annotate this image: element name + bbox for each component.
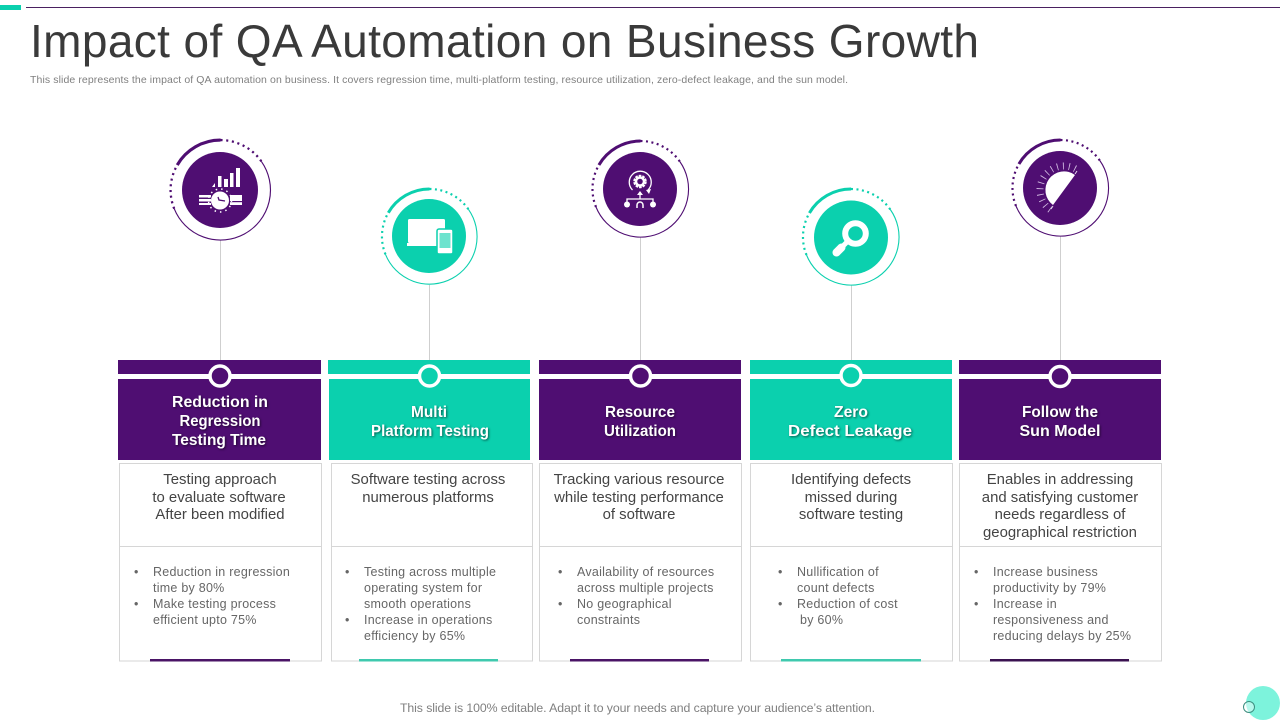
icon: chart and clock in ring [171,140,270,240]
card: Enables in addressing [987,472,1133,488]
card: After been modified [155,507,285,523]
card: • [345,613,350,627]
card: productivity by 79% [993,581,1106,595]
card: Software testing across [351,472,505,488]
header [328,360,530,460]
card: efficiency by 65% [364,629,465,643]
header: Sun Model [1020,423,1100,440]
top accent bar [0,5,1280,10]
header [118,360,321,460]
card: Testing approach [163,472,277,488]
card: missed during [805,490,897,506]
card: constraints [577,613,640,627]
card [540,464,742,662]
card: Reduction of cost [797,597,898,611]
card: • [778,597,783,611]
card [750,464,952,662]
icon: sun dial in ring [1012,140,1109,236]
card: Identifying defects [791,472,911,488]
header: Resource [605,404,675,421]
card: and satisfying customer [982,490,1138,506]
footer note: This slide is 100% editable. Adapt it to your needs and capture your audience’s attention. [400,701,875,715]
card: reducing delays by 25% [993,629,1131,643]
card: geographical restriction [983,525,1137,541]
card: • [974,565,979,579]
card: of software [603,507,675,523]
card: across multiple projects [577,581,714,595]
header: Follow the [1022,404,1098,421]
connector line [851,285,852,360]
card: • [134,597,139,611]
card: Make testing process [153,597,276,611]
card: while testing performance [553,490,724,506]
card: • [974,597,979,611]
header [539,360,741,460]
card: Testing across multiple [364,565,496,579]
card: numerous platforms [362,490,494,506]
header: Reduction in [172,394,268,411]
card: time by 80% [153,581,225,595]
column 3: resource utilization [539,141,742,661]
card: software testing [799,507,903,523]
card: Nullification of [797,565,879,579]
header: Zero [834,404,868,421]
title: Impact of QA Automation on Business Growth [30,15,979,67]
header: Testing Time [172,432,266,449]
card [960,464,1162,662]
card: No geographical [577,597,672,611]
card: Increase in [993,597,1057,611]
card [120,464,322,662]
icon: magnifier in ring [803,189,899,285]
card: by 60% [800,613,843,627]
connector line [220,240,221,360]
card [332,464,532,662]
card: • [134,565,139,579]
card: Availability of resources [577,565,714,579]
connector line [640,237,641,360]
card: smooth operations [364,597,471,611]
corner decoration [1244,686,1280,720]
header: Multi [411,404,447,421]
card: efficient upto 75% [153,613,257,627]
card: • [558,597,563,611]
icon: gear and network in ring [592,141,689,237]
connector line [429,285,430,360]
card: operating system for [364,581,482,595]
card: responsiveness and [993,613,1109,627]
header: Defect Leakage [788,423,912,440]
card: • [778,565,783,579]
column 2: multi platform testing [328,189,532,662]
card: count defects [797,581,875,595]
card: Tracking various resource [554,472,724,488]
header [750,360,952,460]
card: Reduction in regression [153,565,290,579]
card: needs regardless of [995,507,1126,523]
subtitle: This slide represents the impact of QA automation on business. It covers regression time, multi-platform testing, resource utilization, zero-defect leakage, and the sun model. [30,74,848,86]
column 5: follow the sun model [959,140,1162,661]
connector line [1060,236,1061,360]
icon: laptop and phone in ring [382,189,477,284]
card: • [345,565,350,579]
column 4: zero defect leakage [750,189,952,661]
header: Regression [180,413,260,430]
header: Platform Testing [371,423,489,440]
header: Utilization [604,423,676,440]
card: Increase in operations [364,613,492,627]
card: Increase business [993,565,1098,579]
card: to evaluate software [152,490,286,506]
card: • [558,565,563,579]
column 1: reduction in regression testing time [118,140,322,662]
header [959,360,1161,460]
